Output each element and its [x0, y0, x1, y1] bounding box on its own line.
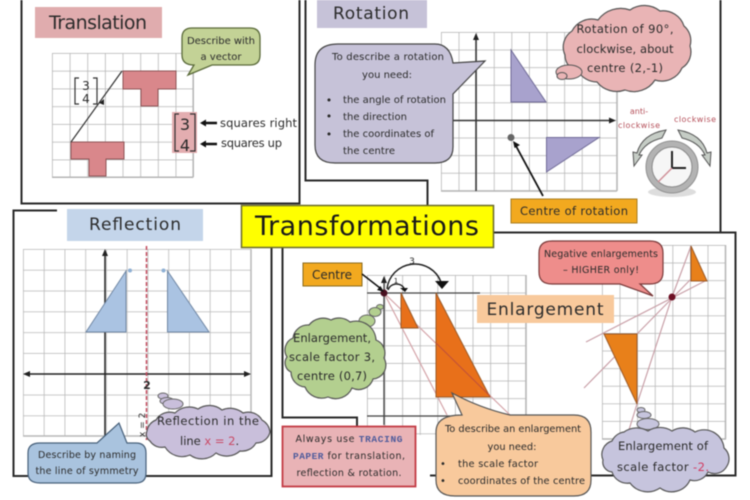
- translation grid: [52, 53, 193, 177]
- heading: translation: [35, 7, 162, 38]
- negative scale large triangle: [604, 334, 637, 404]
- arrow to centre: [513, 141, 543, 196]
- cloud: enlargement scale factor 3: Enlargement,: [293, 331, 371, 345]
- bubble: describing an enlargement: •: [440, 476, 446, 487]
- scale arcs: 1: [394, 277, 398, 285]
- direction labels: anti-: [630, 107, 648, 116]
- scale arcs: [387, 257, 449, 292]
- rotation axes: [441, 33, 616, 191]
- cloud: reflection in the line x = 2: Reflection in the: [157, 414, 259, 428]
- callout: tracing paper: PAPER for translation,: [293, 451, 405, 462]
- enlargement axes: [367, 276, 500, 425]
- bubble: describing a rotation: [315, 44, 485, 163]
- large vector key: 4: [180, 136, 190, 155]
- small orange triangle: [401, 293, 418, 328]
- callout: describe with a vector: [182, 28, 260, 75]
- axis label 2: 2: [143, 379, 151, 392]
- callout: describe with a vector: Describe with: [187, 36, 255, 47]
- bubble: describe by naming line of symmetry: Describe by naming: [38, 450, 136, 461]
- rotation grid: [441, 32, 617, 191]
- bubble: describing a rotation: the centre: [343, 146, 395, 157]
- rotated label x = 2: x = 2: [138, 413, 148, 437]
- bubble: describing a rotation: •: [326, 128, 332, 141]
- translated shape top: [123, 71, 176, 106]
- bubble: describing a rotation: you need:: [362, 70, 412, 81]
- enlargement grid 1: [367, 275, 526, 435]
- translation vector arrow: [71, 71, 122, 142]
- callout: negative enlargements: [539, 241, 663, 296]
- construction line over triangle: [436, 343, 490, 396]
- cloud: enlargement scale factor 3: [285, 304, 386, 399]
- panel: rotation: [306, 0, 720, 232]
- panel: translation: [22, 0, 300, 204]
- bubble: describing a rotation: the coordinates of: [343, 129, 434, 140]
- reflection grid: [23, 249, 251, 436]
- small vector label: [75, 78, 97, 106]
- bubble: describing an enlargement: •: [440, 459, 446, 470]
- equal distance markers: [128, 268, 166, 272]
- arrow from centre label: [362, 274, 384, 292]
- object triangle: [86, 271, 126, 332]
- main title: [242, 206, 494, 248]
- cloud: enlargement of scale factor -2: [602, 408, 729, 492]
- icon: clock with arrows: [633, 130, 711, 197]
- bubble: describing an enlargement: To describe an enlargement: [444, 424, 581, 435]
- mirror line x = 2: [146, 246, 148, 440]
- direction labels: [618, 107, 716, 130]
- heading: reflection: Reflection: [89, 215, 181, 235]
- label: centre of rotation: [511, 199, 637, 223]
- heading: enlargement: Enlargement: [486, 300, 604, 320]
- heading: reflection: [67, 209, 203, 241]
- triangle before rotation: [511, 50, 546, 102]
- bubble: describing an enlargement: coordinates of the centre: [458, 476, 585, 487]
- label: centre of rotation: Centre of rotation: [520, 204, 628, 218]
- reflection axes: [23, 249, 251, 436]
- bubble: describing an enlargement: [436, 393, 591, 496]
- direction labels: clockwise: [674, 115, 716, 124]
- centre point: [380, 290, 388, 296]
- heading: translation: Translation: [48, 12, 147, 34]
- callout: describe with a vector: a vector: [200, 52, 242, 63]
- scale arcs: 3: [409, 257, 415, 267]
- negative enlargement centre: [668, 294, 676, 300]
- heading: enlargement: [477, 295, 614, 323]
- triangle after rotation: [546, 138, 599, 172]
- arrows and vector labels: squares right: [220, 116, 297, 130]
- label: centre: [303, 263, 362, 286]
- label: centre: Centre: [312, 268, 352, 282]
- cloud: enlargement scale factor 3: centre (0,7): [297, 369, 367, 383]
- panel: reflection: [14, 209, 272, 483]
- reflected triangle: [168, 271, 209, 332]
- arrows and vector labels: squares up: [221, 136, 282, 150]
- bubble: describing an enlargement: you need:: [488, 442, 536, 453]
- bubble: describing a rotation: •: [326, 110, 332, 123]
- construction lines: [384, 293, 510, 415]
- small vector label: 4: [82, 92, 90, 106]
- large vector key: [172, 112, 197, 155]
- arrows and vector labels: [200, 116, 297, 150]
- panel: enlargement: [282, 232, 736, 496]
- bubble: describing a rotation: To describe a rotation: [331, 52, 444, 63]
- small vector label: 3: [82, 79, 90, 93]
- cloud: reflection in the line x = 2: [146, 393, 270, 459]
- original shape bottom: [71, 142, 124, 176]
- negative enlargement construction lines: [584, 246, 707, 433]
- enlargement grid 2: [602, 245, 726, 439]
- bubble: describing an enlargement: the scale factor: [458, 459, 539, 470]
- heading: rotation: Rotation: [333, 4, 409, 24]
- cloud: enlargement of scale factor -2: Enlargement of: [618, 439, 709, 453]
- large orange triangle: [436, 293, 490, 397]
- bubble: describing a rotation: •: [326, 94, 332, 107]
- callout: negative enlargements: – HIGHER only!: [563, 265, 639, 276]
- callout: negative enlargements: Negative enlargements: [544, 249, 658, 260]
- cloud: reflection in the line x = 2: line x = 2.: [180, 434, 239, 448]
- large vector key: 3: [180, 115, 190, 134]
- callout: tracing paper: reflection & rotation.: [296, 468, 402, 479]
- cloud: rotation of 90 degrees: Rotation of 90°,: [576, 22, 674, 36]
- cloud: rotation of 90 degrees: [556, 5, 691, 92]
- bubble: describing a rotation: the direction: [343, 112, 407, 123]
- callout: tracing paper: Always use TRACING: [296, 434, 403, 445]
- callout: tracing paper: [282, 426, 416, 486]
- cloud: rotation of 90 degrees: clockwise, about: [576, 42, 674, 56]
- bubble: describing a rotation: the angle of rotation: [343, 95, 446, 106]
- direction labels: clockwise: [618, 121, 660, 130]
- bubble: describe by naming line of symmetry: the line of symmetry: [36, 466, 139, 477]
- bubble: describe by naming line of symmetry: [28, 423, 146, 483]
- negative scale small triangle: [691, 246, 707, 281]
- cloud: rotation of 90 degrees: centre (2,-1): [587, 61, 663, 75]
- cloud: enlargement of scale factor -2: scale factor -2.: [617, 460, 709, 474]
- heading: rotation: [317, 0, 427, 28]
- centre of rotation point: [508, 134, 514, 141]
- main title: Transformations: [254, 211, 479, 242]
- cloud: enlargement scale factor 3: scale factor 3,: [289, 350, 375, 364]
